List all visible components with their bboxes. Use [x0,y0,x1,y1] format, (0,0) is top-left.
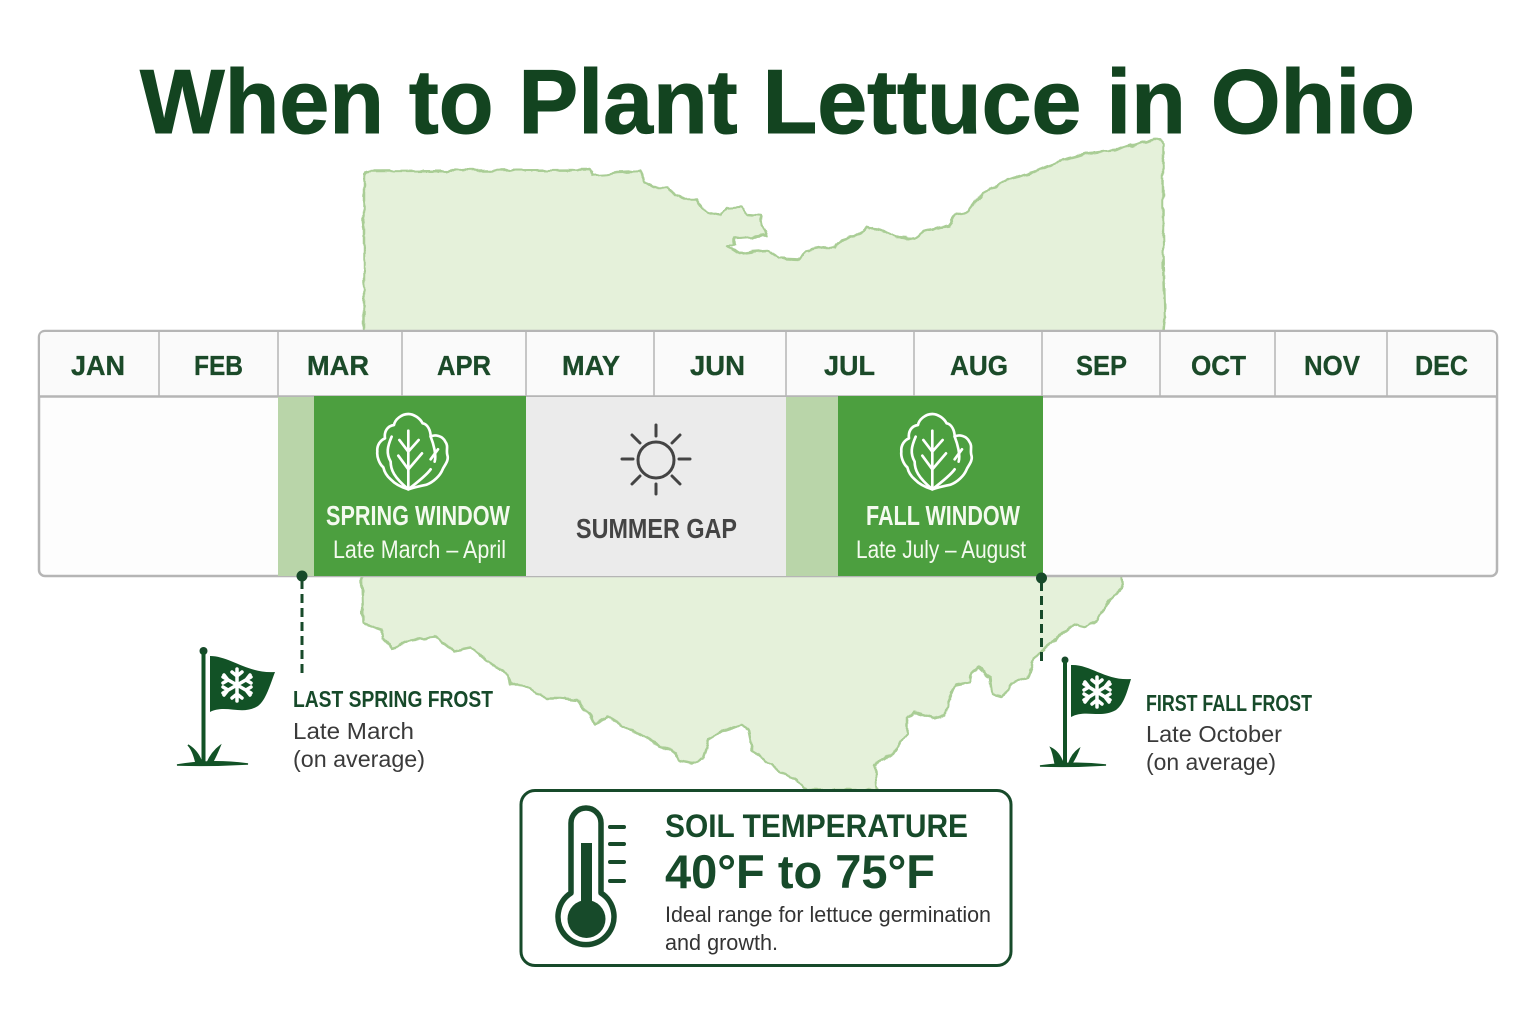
snowflake [223,669,251,701]
callout: first fall frost: Late October [1146,721,1282,747]
title: When to Plant Lettuce in Ohio [140,52,1415,153]
month header row: JUL [824,350,875,381]
timeline [39,331,1497,576]
month header row: MAY [562,350,620,381]
Ohio state map [362,139,1165,790]
callout: first fall frost [1146,690,1312,775]
icon: sun [622,425,690,494]
callout: first fall frost: (on average) [1146,749,1276,775]
month header row: JUN [690,350,745,381]
callout: last spring frost: (on average) [293,746,425,772]
icon: frost flag right [1040,656,1131,766]
icon: lettuce [901,414,972,489]
callout: last spring frost: LAST SPRING FROST [293,686,493,712]
icon: thermometer [558,808,624,945]
month header row: FEB [194,350,243,381]
timeline body [39,331,1497,576]
description [665,902,991,955]
callout: last spring frost: Late March [293,718,414,744]
month header row: SEP [1076,350,1127,381]
month header row: NOV [1304,350,1360,381]
panel: soil temperature [521,790,1011,966]
icon: lettuce [377,414,448,489]
dates: Late July – August [856,536,1026,564]
dates: Late March – April [333,536,506,564]
callout: last spring frost [293,686,493,772]
label: SUMMER GAP [576,513,737,544]
label: FALL WINDOW [866,500,1020,531]
heading: SOIL TEMPERATURE [665,808,968,844]
fall window panel [838,396,1043,576]
icon: frost flag left [177,647,275,765]
month header row: AUG [950,350,1008,381]
last spring frost marker line [296,570,308,674]
spring window panel [314,396,526,576]
first fall frost marker line [1036,572,1047,661]
month header row: OCT [1191,350,1246,381]
snowflake [1084,677,1110,707]
label: SPRING WINDOW [326,500,510,531]
month header row [39,332,1497,396]
callout: first fall frost: FIRST FALL FROST [1146,690,1312,716]
summer gap panel [526,397,786,576]
fall shoulder band [786,397,838,576]
month header row: MAR [307,350,369,381]
month header row: DEC [1415,350,1468,381]
month header row: JAN [71,350,125,381]
description: and growth. [665,930,778,955]
description: Ideal range for lettuce germination [665,902,991,927]
month header row: APR [437,350,491,381]
temperature range: 40°F to 75°F [665,845,935,898]
spring shoulder band [278,397,314,576]
